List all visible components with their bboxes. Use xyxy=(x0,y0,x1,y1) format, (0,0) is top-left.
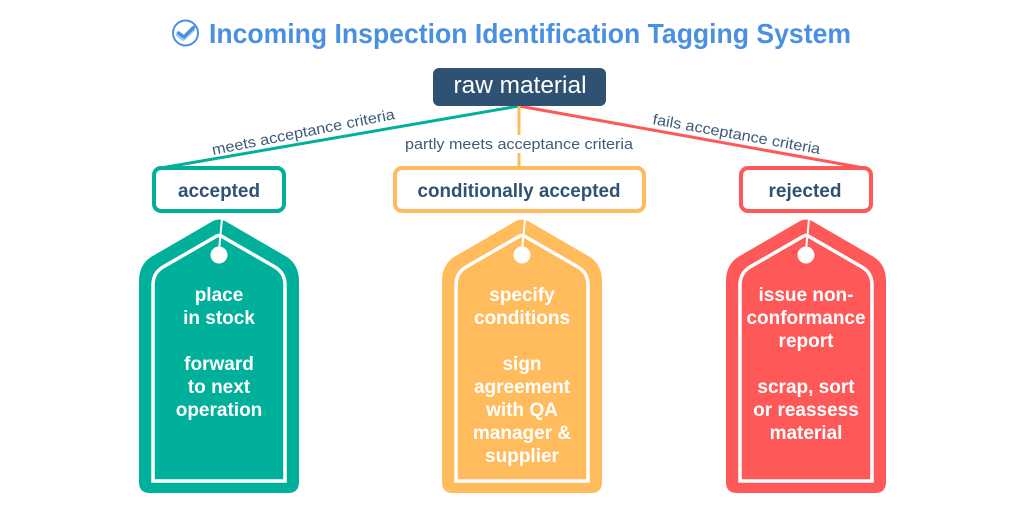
tag text: conditionally accepted: specify xyxy=(489,285,555,306)
tag text: rejected: material xyxy=(770,423,842,444)
box: conditionally accepted: conditionally accepted xyxy=(418,181,620,202)
tag text: rejected: or reassess xyxy=(753,400,859,421)
tag text: accepted: place xyxy=(195,285,243,306)
tag text: conditionally accepted: conditions xyxy=(474,308,570,329)
tag text: rejected xyxy=(746,285,866,444)
label: fails acceptance criteria: fails acceptance criteria xyxy=(651,111,822,158)
tag text: rejected: conformance xyxy=(746,308,866,329)
connector: fails acceptance criteria xyxy=(519,106,864,168)
tag text: accepted: forward xyxy=(184,354,254,375)
tag text: conditionally accepted xyxy=(473,285,571,467)
connector: meets acceptance criteria xyxy=(161,106,519,168)
tag text: conditionally accepted: supplier xyxy=(485,446,560,467)
tag text: conditionally accepted: manager & xyxy=(473,423,571,444)
tag text: rejected: scrap, sort xyxy=(757,377,855,398)
tag: conditionally accepted xyxy=(442,219,602,493)
tag text: conditionally accepted: agreement xyxy=(474,377,571,398)
box: rejected: rejected xyxy=(768,181,842,202)
label background xyxy=(403,135,635,153)
heading text: Incoming Inspection Identification Tagging System xyxy=(209,18,851,49)
tag text: accepted: operation xyxy=(176,400,262,421)
box: rejected xyxy=(741,168,871,211)
icon: check mark circle xyxy=(173,20,198,46)
tag: accepted xyxy=(139,219,299,493)
root box: raw material xyxy=(433,68,606,106)
box: conditionally accepted xyxy=(395,168,644,211)
tag text: conditionally accepted: with QA xyxy=(485,400,558,421)
tag text: conditionally accepted: sign xyxy=(502,354,542,375)
tag: rejected xyxy=(726,219,886,493)
title xyxy=(173,18,851,49)
label: meets acceptance criteria: meets acceptance criteria xyxy=(210,106,397,159)
tag text: accepted: in stock xyxy=(183,308,255,329)
box: accepted: accepted xyxy=(178,181,260,202)
tag text: rejected: report xyxy=(779,331,834,352)
tag text: accepted xyxy=(176,285,262,421)
connector: partly meets acceptance criteria xyxy=(518,105,520,168)
box: accepted xyxy=(154,168,284,211)
root box: raw material: raw material xyxy=(454,72,586,99)
label: partly meets acceptance criteria: partly meets acceptance criteria xyxy=(405,136,634,153)
tag text: accepted: to next xyxy=(188,377,251,398)
tag text: rejected: issue non- xyxy=(758,285,854,306)
